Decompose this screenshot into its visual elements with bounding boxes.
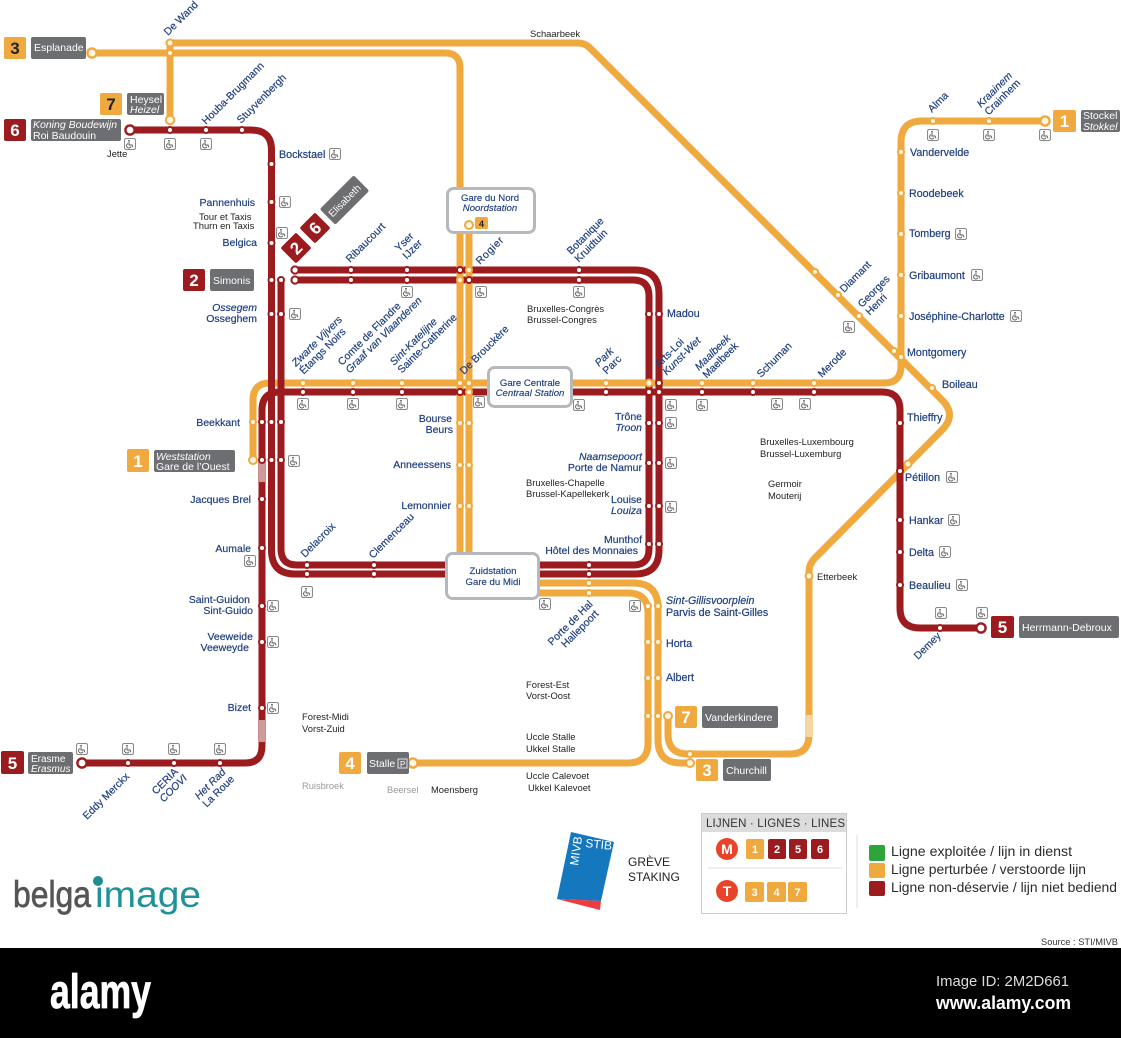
station box: Gare du Nord xyxy=(448,188,534,232)
red stations xyxy=(77,125,986,768)
station names: horizontal left aligned: Montgomery xyxy=(907,347,967,359)
railway station names: Bruxelles-Chapelle xyxy=(526,477,605,488)
station names: rotated: Botanique xyxy=(565,215,607,257)
station names: horizontal right aligned: Bourse xyxy=(419,413,452,425)
station names: horizontal left aligned: Sint-Gillisvoorplein xyxy=(666,595,755,607)
station names: rotated: Ribaucourt xyxy=(344,221,388,265)
station names: rotated: Comte de Flandre xyxy=(336,300,404,368)
line 2 red inner ring xyxy=(281,280,649,565)
station box: Gare Centrale: Gare Centrale xyxy=(500,378,560,389)
station names: horizontal left aligned: Bockstael xyxy=(279,149,325,161)
station names: rotated: CERIA xyxy=(150,766,181,797)
strike heading: GRÈVE xyxy=(628,854,670,869)
STIB MIVB logo: STIB xyxy=(585,836,613,853)
railway station names: Jette xyxy=(107,148,127,159)
station box: Gare du Nord: Noordstation xyxy=(463,203,517,214)
station names: horizontal right aligned: Belgica xyxy=(223,237,257,249)
terminus: 4 Stalle: P xyxy=(400,760,405,769)
station names: rotated: Delacroix xyxy=(299,520,339,560)
station names: rotated: Schuman xyxy=(755,340,795,380)
station names: horizontal right aligned: Trône xyxy=(615,411,642,423)
STIB MIVB logo xyxy=(557,832,614,910)
station names: horizontal right aligned: Veeweyde xyxy=(201,642,249,654)
terminus: 3 Churchill: Churchill xyxy=(726,765,767,777)
station names: horizontal right aligned xyxy=(189,197,643,714)
station names: rotated: Graaf van Vlaanderen xyxy=(343,295,425,376)
terminus: 1 Gare de l'Ouest: 1 xyxy=(133,452,143,471)
station names: horizontal left aligned: Horta xyxy=(666,638,692,650)
line 7 orange upper branch and diagonal xyxy=(170,43,950,754)
railway station names: Etterbeek xyxy=(817,571,857,582)
station names: rotated: Arts-Loi xyxy=(653,336,687,370)
wheelchair access icons xyxy=(77,130,1050,754)
railway station names: Bruxelles-Congrès xyxy=(527,303,604,314)
station box: Gare du Midi: Gare du Midi xyxy=(466,577,520,588)
lines key panel: M xyxy=(721,841,733,857)
station names: horizontal right aligned: Hôtel des Monnaies xyxy=(545,545,638,557)
lines key panel: 2 xyxy=(774,844,780,856)
station names: horizontal left aligned: Tomberg xyxy=(909,228,951,240)
line 3 orange south section xyxy=(535,583,690,763)
railway station names: Brussel-Kapellekerk xyxy=(526,488,610,499)
station names: rotated: Clemenceau xyxy=(367,511,417,561)
station names: rotated: Sainte-Catherine xyxy=(395,312,460,376)
terminus: 6 Roi Baudouin: Koning Boudewijn xyxy=(33,119,117,131)
station names: horizontal left aligned: Vandervelde xyxy=(910,147,969,159)
railway station names: Moensberg xyxy=(431,784,478,795)
station names: rotated: Eddy Merckx xyxy=(81,770,133,822)
terminus: 5 Erasme xyxy=(1,751,73,775)
line 4 orange north section xyxy=(466,225,472,560)
station names: rotated: Rogier xyxy=(474,234,507,267)
station box: Gare du Nord: Gare du Nord xyxy=(461,193,519,204)
railway station names: Forest-Midi xyxy=(302,711,349,722)
station names: rotated: Maalbeek xyxy=(693,332,734,373)
railway station names: Beersel xyxy=(387,785,419,795)
railway station names: Uccle Stalle xyxy=(526,731,576,742)
station names: horizontal right aligned: Louise xyxy=(611,494,642,506)
station names: rotated: Kunst-Wet xyxy=(660,334,704,378)
station names: rotated: Yser xyxy=(393,230,417,254)
station box: Gare du Nord: 4 xyxy=(479,219,484,229)
lines key panel: 3 xyxy=(751,887,758,899)
station names: horizontal right aligned: Pannenhuis xyxy=(200,197,255,209)
terminus: 3 Esplanade: 3 xyxy=(10,39,20,58)
station names: rotated: IJzer xyxy=(400,237,425,262)
terminus: 1 Gare de l'Ouest: Gare de l’Ouest xyxy=(156,461,230,473)
status legend: Ligne non-déservie / lijn niet bediend xyxy=(891,880,1117,895)
terminus: 3 Esplanade xyxy=(4,37,86,59)
terminus: 2 Simonis xyxy=(183,269,254,291)
station names: horizontal left aligned: Albert xyxy=(666,672,694,684)
railway station names: Thurn en Taxis xyxy=(193,220,255,231)
station names: rotated: Stuyvenbergh xyxy=(235,72,289,126)
terminus: 7 Heysel: Heysel xyxy=(130,94,162,106)
lines key panel: 7 xyxy=(794,887,801,899)
railway station names: Ukkel Kalevoet xyxy=(528,782,591,793)
station names: horizontal left aligned: Thieffry xyxy=(907,412,943,424)
station names: horizontal right aligned: Osseghem xyxy=(206,313,257,325)
Alamy footer band xyxy=(0,948,1121,1038)
line 4 orange south section xyxy=(413,593,648,763)
line 5 red route xyxy=(82,392,981,763)
station names: rotated: Diamant xyxy=(838,259,874,295)
line 1 orange route xyxy=(253,121,1045,460)
railway station names xyxy=(107,28,857,795)
railway station names: Ruisbroek xyxy=(302,781,344,791)
terminus: 7 Vanderkindere xyxy=(675,706,778,728)
terminus: 1 Stockel: Stokkel xyxy=(1083,121,1118,133)
station names: rotated: Maelbeek xyxy=(700,340,742,381)
lines key panel: 1 xyxy=(752,844,758,856)
terminus: 5 Erasme: 5 xyxy=(8,754,17,773)
terminus: 4 Stalle: Stalle xyxy=(369,758,395,770)
terminus: 2 Simonis: 2 xyxy=(189,271,199,290)
station names: rotated: Georges xyxy=(856,273,893,310)
station names: rotated: Kruidtuin xyxy=(572,227,610,265)
station names: horizontal right aligned: Munthof xyxy=(604,534,642,546)
station names: rotated: Crainhem xyxy=(982,77,1023,118)
station names: horizontal left aligned: Pétillon xyxy=(905,472,940,484)
station names: rotated: COOVI xyxy=(157,772,190,805)
railway station names: Brussel-Congres xyxy=(527,314,597,325)
status legend xyxy=(857,835,1117,908)
station names: horizontal right aligned: Beekkant xyxy=(196,417,240,429)
terminus: 3 Esplanade: Esplanade xyxy=(34,42,84,54)
station names: rotated: Kraainem xyxy=(975,70,1015,110)
station names: rotated: Het Rad xyxy=(193,766,229,802)
station names: horizontal right aligned: Anneessens xyxy=(393,459,451,471)
lines key panel: 4 xyxy=(773,887,780,899)
terminus: 1 Stockel: 1 xyxy=(1060,112,1069,131)
station names: horizontal right aligned: Porte de Namur xyxy=(568,462,642,474)
station box: Gare Centrale xyxy=(488,368,572,406)
Alamy footer band: alamy xyxy=(50,966,151,1019)
terminus: 2 6 Elisabeth xyxy=(280,175,369,264)
railway station names: Vorst-Oost xyxy=(526,690,571,701)
railway station names: Schaarbeek xyxy=(530,28,580,39)
terminus: 6 Roi Baudouin: 6 xyxy=(10,121,20,140)
station names: rotated: Henri xyxy=(863,292,890,318)
railway station names: Uccle Calevoet xyxy=(526,770,589,781)
source credit: Source : STI/MIVB xyxy=(1041,937,1118,947)
station names: horizontal right aligned: Naamsepoort xyxy=(579,451,643,463)
station names: horizontal right aligned: Jacques Brel xyxy=(190,494,251,506)
station names: horizontal right aligned: Veeweide xyxy=(207,631,253,643)
terminus: 1 Gare de l'Ouest xyxy=(127,449,235,473)
terminus: 1 Stockel xyxy=(1053,110,1120,133)
station names: rotated xyxy=(81,0,1023,822)
station names: rotated: Houba-Brugmann xyxy=(200,60,267,127)
station names: rotated: Porte de Hal xyxy=(546,598,595,648)
terminus: 5 Herrmann-Debroux xyxy=(991,616,1119,638)
terminus: 6 Roi Baudouin: Roi Baudouin xyxy=(33,130,96,142)
station names: horizontal left aligned: Parvis de Saint-Gilles xyxy=(666,607,768,619)
railway station names: Brussel-Luxemburg xyxy=(760,448,841,459)
station names: horizontal right aligned: Troon xyxy=(615,422,642,434)
lines key panel: LIJNEN · LIGNES · LINES xyxy=(706,818,845,830)
station names: rotated: Parc xyxy=(600,353,624,377)
station names: horizontal left aligned: Joséphine-Charlotte xyxy=(909,311,1005,323)
terminus: 7 Heysel: Heizel xyxy=(130,104,160,116)
terminus: 4 Stalle xyxy=(339,752,409,774)
terminus: 2 6 Elisabeth: 6 xyxy=(305,218,325,238)
railway station names: Germoir xyxy=(768,478,802,489)
terminus: 1 Gare de l'Ouest: Weststation xyxy=(156,451,211,463)
station names: horizontal left aligned: Beaulieu xyxy=(909,580,951,592)
terminus: 1 Stockel: Stockel xyxy=(1083,110,1117,122)
terminus: 2 6 Elisabeth: 2 xyxy=(286,238,306,258)
station box: Gare du Midi xyxy=(446,554,538,598)
station box: Gare du Midi: Zuidstation xyxy=(470,566,516,577)
station names: horizontal right aligned: Ossegem xyxy=(212,302,257,314)
station names: horizontal left aligned xyxy=(279,147,1005,684)
station box: Gare Centrale: Centraal Station xyxy=(496,388,564,399)
station names: rotated: Hallepoort xyxy=(559,608,601,650)
station names: horizontal right aligned: Lemonnier xyxy=(401,500,451,512)
station names: horizontal right aligned: Bizet xyxy=(228,702,251,714)
strike heading: STAKING xyxy=(628,870,680,884)
station names: horizontal left aligned: Boileau xyxy=(942,379,978,391)
terminus: 4 Stalle: 4 xyxy=(345,754,355,773)
station names: rotated: Zwarte Vijvers xyxy=(289,313,346,370)
status legend: Ligne exploitée / lijn in dienst xyxy=(891,844,1072,859)
faded watermark patches on lines xyxy=(259,463,812,742)
station names: rotated: Alma xyxy=(926,90,951,115)
lines key panel: 6 xyxy=(817,844,823,856)
lines key panel: 5 xyxy=(795,844,801,856)
Alamy footer band: Image ID: 2M2D661 xyxy=(936,973,1069,990)
station names: horizontal left aligned: Delta xyxy=(909,547,934,559)
railway station names: Ukkel Stalle xyxy=(526,743,576,754)
station names: rotated: Sint-Katelijne xyxy=(388,316,440,368)
station names: rotated: De Wand xyxy=(162,0,201,38)
lines key panel xyxy=(702,814,846,914)
STIB MIVB logo: MIVB xyxy=(567,835,585,866)
railway station names: Tour et Taxis xyxy=(199,211,252,222)
Alamy footer band: www.alamy.com xyxy=(935,993,1071,1013)
orange stations xyxy=(87,40,1050,768)
railway station names: Forest-Est xyxy=(526,679,570,690)
line 6 red outer ring xyxy=(130,130,659,574)
terminus: 2 6 Elisabeth: Elisabeth xyxy=(327,183,364,220)
station names: rotated: Étangs Noirs xyxy=(297,325,348,377)
terminus: 7 Vanderkindere: Vanderkindere xyxy=(705,712,773,724)
station names: horizontal left aligned: Gribaumont xyxy=(909,270,965,282)
station names: horizontal left aligned: Hankar xyxy=(909,515,944,527)
terminus: 2 Simonis: Simonis xyxy=(213,275,250,287)
terminus: 7 Heysel: 7 xyxy=(106,95,116,114)
station names: horizontal right aligned: Sint-Guido xyxy=(203,605,253,617)
terminus: 7 Heysel xyxy=(100,93,164,116)
station names: rotated: Demey xyxy=(912,630,944,662)
terminus: 3 Churchill: 3 xyxy=(702,761,712,780)
railway station names: Bruxelles-Luxembourg xyxy=(760,436,854,447)
station names: horizontal left aligned: Roodebeek xyxy=(909,188,964,200)
station names: rotated: Park xyxy=(593,345,617,369)
station names: horizontal left aligned: Madou xyxy=(667,308,700,320)
railway station names: Vorst-Zuid xyxy=(302,723,345,734)
Belga Image logo: belga xyxy=(13,874,91,915)
station names: rotated: De Brouckère xyxy=(458,323,512,377)
terminus: 5 Herrmann-Debroux: 5 xyxy=(998,618,1007,637)
terminus: 5 Erasme: Erasme xyxy=(31,754,66,765)
station names: horizontal right aligned: Aumale xyxy=(215,543,251,555)
station names: horizontal right aligned: Saint-Guidon xyxy=(189,594,250,606)
station names: rotated: Merode xyxy=(816,346,849,380)
terminus: 7 Vanderkindere: 7 xyxy=(681,708,691,727)
terminus: 6 Roi Baudouin xyxy=(4,119,121,142)
strike heading xyxy=(628,854,680,884)
station names: rotated: La Roue xyxy=(200,773,237,810)
terminus: 3 Churchill xyxy=(696,759,771,781)
Belga Image logo: image xyxy=(95,874,201,915)
station names: horizontal right aligned: Louiza xyxy=(611,505,642,517)
terminus: 5 Herrmann-Debroux: Herrmann-Debroux xyxy=(1022,622,1113,634)
terminus: 5 Erasme: Erasmus xyxy=(31,764,70,775)
railway station names: Mouterij xyxy=(768,490,801,501)
Belga Image logo xyxy=(13,874,201,915)
status legend: Ligne perturbée / verstoorde lijn xyxy=(891,862,1086,877)
lines key panel: T xyxy=(723,883,732,899)
line 3 orange north section xyxy=(92,53,460,560)
station names: horizontal right aligned: Beurs xyxy=(426,424,453,436)
